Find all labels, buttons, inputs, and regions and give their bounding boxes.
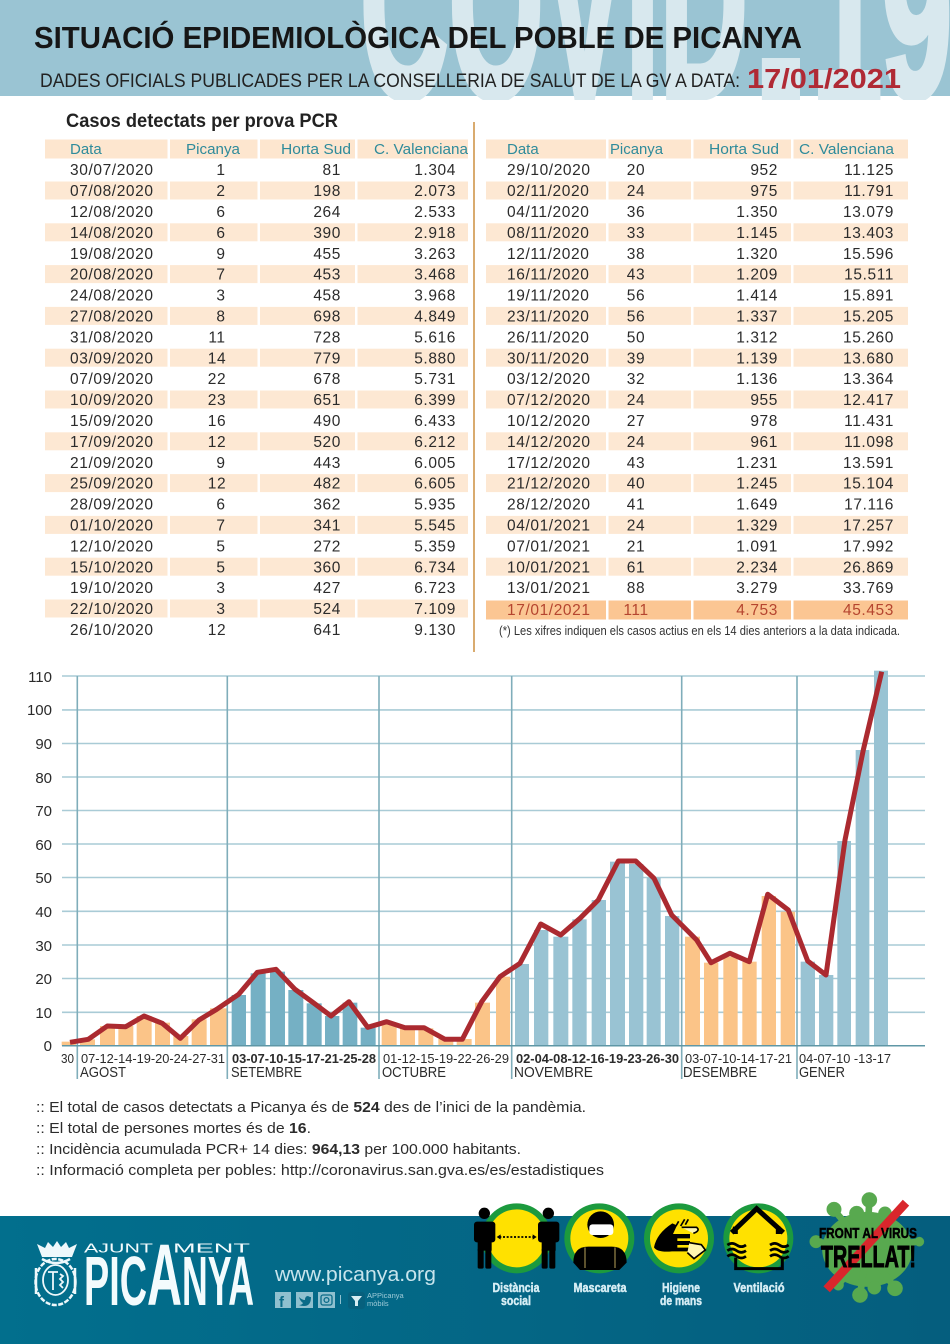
right table rows: 19/11/2020 xyxy=(507,288,589,305)
social icons: APPicanya xyxy=(367,1291,405,1300)
header banner xyxy=(0,0,950,100)
left table rows: 458 xyxy=(313,288,341,305)
right table rows: 13/01/2021 xyxy=(507,580,591,597)
red trend line xyxy=(70,672,882,1042)
left table rows: 5.935 xyxy=(414,497,456,514)
y axis labels xyxy=(27,669,52,1055)
right table rows: 33 xyxy=(627,225,645,242)
left table rows: 30/07/2020 xyxy=(70,162,154,179)
right table rows: 27 xyxy=(627,413,645,430)
right table rows: 07/12/2020 xyxy=(507,392,591,409)
right table rows: 36 xyxy=(627,204,645,221)
text block: notes: :: Informació completa per pobles: http://coronavirus.san.gva.es/es/estadistiques xyxy=(36,1162,604,1179)
left table rows: 14 xyxy=(208,350,226,367)
icon captions: Higiene xyxy=(662,1280,700,1295)
left table rows: 6.399 xyxy=(414,392,456,409)
highlighted latest row xyxy=(507,602,894,619)
icon captions: Distància xyxy=(492,1280,540,1295)
right table rows: 43 xyxy=(627,455,645,472)
left table rows: 07/09/2020 xyxy=(70,371,154,388)
right table rows: 15.104 xyxy=(843,476,894,493)
left table rows: 19/08/2020 xyxy=(70,246,154,263)
left table rows: 6.723 xyxy=(414,580,456,597)
x axis month labels: DESEMBRE xyxy=(683,1065,757,1081)
right table header: Data xyxy=(507,141,539,158)
left table rows: 5.545 xyxy=(414,518,456,534)
y axis labels: 100 xyxy=(27,702,52,719)
right table rows: 61 xyxy=(627,559,645,576)
panel: right table xyxy=(486,139,908,620)
wordmark: PIC xyxy=(84,1242,147,1320)
x axis month labels: OCTUBRE xyxy=(382,1065,446,1081)
left table header xyxy=(70,141,469,158)
left table rows: 28/09/2020 xyxy=(70,497,154,514)
left table rows: 26/10/2020 xyxy=(70,622,154,639)
right table rows: 15.511 xyxy=(844,267,894,284)
left table rows: 6.005 xyxy=(414,455,456,472)
right table rows: 50 xyxy=(627,329,645,346)
left table rows: 6.433 xyxy=(414,413,456,430)
wordmark xyxy=(84,1227,254,1324)
left table rows: 198 xyxy=(313,183,341,200)
left table rows: 678 xyxy=(313,371,341,388)
right table rows: 15.205 xyxy=(843,308,894,326)
right table rows: 17/12/2020 xyxy=(507,455,591,472)
y axis labels: 110 xyxy=(28,669,52,686)
icon captions xyxy=(492,1280,785,1308)
left table rows: 22 xyxy=(208,371,226,388)
left table rows: 15/09/2020 xyxy=(70,413,154,430)
x axis day labels: 03-07-10-15-17-21-25-28 xyxy=(232,1051,376,1066)
panel: left table xyxy=(45,139,469,639)
right table header xyxy=(507,141,895,158)
right table rows: 21/12/2020 xyxy=(507,476,591,493)
left table rows: 3.263 xyxy=(414,246,456,263)
left table rows: 5 xyxy=(216,538,226,555)
right table rows: 13.079 xyxy=(843,204,894,221)
left table rows: 2.073 xyxy=(414,183,456,200)
right table rows: 1.231 xyxy=(736,455,778,472)
left table rows: 728 xyxy=(313,329,341,346)
left table rows: 5.616 xyxy=(414,329,456,346)
left table rows: 453 xyxy=(313,267,341,284)
left table rows: 3.968 xyxy=(414,288,456,305)
left table rows: 17/09/2020 xyxy=(70,434,154,451)
left table rows: 21/09/2020 xyxy=(70,455,154,472)
right table header: Horta Sud xyxy=(709,141,779,158)
right table rows: 56 xyxy=(627,288,645,305)
right table rows: 1.337 xyxy=(736,308,778,326)
left table rows: 27/08/2020 xyxy=(70,308,154,326)
bars: left half xyxy=(62,972,490,1046)
baseline xyxy=(62,1045,925,1047)
right table rows: 1.312 xyxy=(736,329,778,346)
right table rows xyxy=(507,162,894,597)
right table rows: 29/10/2020 xyxy=(507,162,591,179)
x axis month labels xyxy=(80,1065,845,1081)
highlighted latest row: 45.453 xyxy=(843,602,894,619)
left table rows: 482 xyxy=(313,476,341,493)
right table rows: 978 xyxy=(750,413,778,430)
right table header: C. Valenciana xyxy=(799,141,895,158)
x axis day labels: 02-04-08-12-16-19-23-26-30 xyxy=(516,1051,679,1066)
right table rows: 15.260 xyxy=(843,329,894,346)
icon captions: Mascareta xyxy=(574,1280,627,1295)
social icons xyxy=(275,1291,405,1311)
left table rows: 427 xyxy=(313,580,341,597)
date: 17/01/2021 xyxy=(747,63,901,94)
right table rows: 1.320 xyxy=(736,246,778,263)
right table rows: 28/12/2020 xyxy=(507,497,591,514)
right table rows: 30/11/2020 xyxy=(507,350,589,367)
x axis day labels: 03-07-10-14-17-21 xyxy=(685,1051,792,1066)
left table rows: 2 xyxy=(216,183,226,200)
icon: coat of arms xyxy=(36,1241,77,1305)
right table rows: 03/12/2020 xyxy=(507,371,591,388)
left table rows: 455 xyxy=(313,246,341,263)
right table rows: 11.125 xyxy=(844,162,894,179)
right table rows: 17.116 xyxy=(844,497,894,514)
left table rows: 22/10/2020 xyxy=(70,601,154,618)
left table rows: 7 xyxy=(216,267,226,284)
highlighted latest row: 111 xyxy=(623,602,649,619)
right table rows: 13.364 xyxy=(843,371,894,388)
left table rows: 490 xyxy=(313,413,341,430)
left table rows: 264 xyxy=(313,204,341,221)
text block: notes xyxy=(36,1099,604,1179)
left table rows: 2.533 xyxy=(414,204,456,221)
left table rows: 9 xyxy=(216,246,226,263)
left table rows: 5 xyxy=(216,559,226,576)
right table rows: 975 xyxy=(750,183,778,200)
right table rows: 04/01/2021 xyxy=(507,518,591,534)
x axis day labels: 01-12-15-19-22-26-29 xyxy=(383,1051,509,1066)
y axis labels: 80 xyxy=(35,770,52,787)
left table rows: 19/10/2020 xyxy=(70,580,154,597)
left table rows: 3 xyxy=(216,580,226,597)
left table rows: 2.918 xyxy=(414,225,456,242)
right table rows: 17.257 xyxy=(843,518,894,534)
right table rows: 23/11/2020 xyxy=(507,308,589,326)
right table rows: 40 xyxy=(627,476,645,493)
right table rows: 1.245 xyxy=(736,476,778,493)
bars: right half xyxy=(496,671,888,1046)
y axis labels: 30 xyxy=(35,938,52,955)
campaign slogan xyxy=(819,1225,917,1274)
right table rows: 1.649 xyxy=(736,497,778,514)
right table rows: 1.145 xyxy=(736,225,778,242)
left table rows: 9 xyxy=(216,455,226,472)
right table rows: 1.091 xyxy=(736,538,778,555)
x axis month labels: NOVEMBRE xyxy=(514,1065,593,1081)
right table rows: 3.279 xyxy=(736,580,778,597)
left table rows: 362 xyxy=(313,497,341,514)
left table rows: 3 xyxy=(216,601,226,618)
right table rows: 1.350 xyxy=(736,204,778,221)
highlighted latest row: 17/01/2021 xyxy=(507,602,591,619)
left table rows: 07/08/2020 xyxy=(70,183,154,200)
left table rows: 641 xyxy=(313,622,341,639)
right table rows: 24 xyxy=(627,183,645,200)
right table rows: 88 xyxy=(627,580,645,597)
left table rows: 4.849 xyxy=(414,308,456,326)
social icons: f xyxy=(279,1294,285,1311)
right table rows: 04/11/2020 xyxy=(507,204,589,221)
right table rows: 1.139 xyxy=(736,350,778,367)
left table header: Horta Sud xyxy=(281,141,351,158)
right table rows: 32 xyxy=(627,371,645,388)
right table rows: 952 xyxy=(750,162,778,179)
left table rows: 14/08/2020 xyxy=(70,225,154,242)
right table rows: 1.209 xyxy=(736,267,778,284)
left table rows: 12/08/2020 xyxy=(70,204,154,221)
right table rows: 02/11/2020 xyxy=(507,183,589,200)
left table rows: 6 xyxy=(216,225,226,242)
right table rows: 24 xyxy=(627,518,645,534)
chart: cases bars and line xyxy=(27,669,925,1081)
icon: ventilation xyxy=(723,1203,793,1273)
right table rows: 1.136 xyxy=(736,371,778,388)
text block: notes: :: El total de persones mortes és de 16. xyxy=(36,1120,311,1137)
right table rows: 10/01/2021 xyxy=(507,559,591,576)
x axis month labels: SETEMBRE xyxy=(231,1065,302,1081)
left table rows: 272 xyxy=(313,538,341,555)
left table rows: 24/08/2020 xyxy=(70,288,154,305)
left table rows: 25/09/2020 xyxy=(70,476,154,493)
right table rows: 1.414 xyxy=(736,288,778,305)
left table rows: 9.130 xyxy=(414,622,456,639)
right table rows: 13.591 xyxy=(843,455,894,472)
left table rows: 15/10/2020 xyxy=(70,559,154,576)
left table header: C. Valenciana xyxy=(374,141,469,158)
left table rows: 3.468 xyxy=(414,267,456,284)
footnote: (*) Les xifres indiquen els casos actius en els 14 dies anteriors a la data indicada. xyxy=(499,624,900,638)
y axis labels: 20 xyxy=(35,971,52,988)
left table rows: 779 xyxy=(313,350,341,367)
right table rows: 08/11/2020 xyxy=(507,225,589,242)
icon: virus with slash xyxy=(810,1192,924,1303)
right table rows: 14/12/2020 xyxy=(507,434,591,451)
x axis day labels: 30 xyxy=(61,1051,74,1066)
right table rows: 15.596 xyxy=(843,246,894,263)
social icons: mòbils xyxy=(367,1299,389,1308)
icon captions: Ventilació xyxy=(734,1280,785,1295)
table heading: Casos detectats per prova PCR xyxy=(66,111,338,132)
y axis labels: 90 xyxy=(35,736,52,753)
right table rows: 11.791 xyxy=(844,183,894,200)
x axis day labels xyxy=(61,1051,891,1066)
subtitle: DADES OFICIALS PUBLICADES PER LA CONSELLERIA DE SALUT DE LA GV A DATA: xyxy=(40,71,740,92)
y axis labels: 50 xyxy=(35,870,52,887)
highlighted latest row: 4.753 xyxy=(736,602,778,619)
x axis month labels: GENER xyxy=(799,1065,845,1081)
decorative ghost text COVID-19 xyxy=(364,0,950,100)
left table rows: 6 xyxy=(216,497,226,514)
left table header: Data xyxy=(70,141,102,158)
right table rows: 43 xyxy=(627,267,645,284)
right table rows: 13.680 xyxy=(843,350,894,367)
table divider xyxy=(473,122,475,652)
icon captions: de mans xyxy=(660,1293,702,1308)
icon captions: social xyxy=(501,1293,531,1308)
icon: hand hygiene xyxy=(644,1203,714,1273)
y axis labels: 10 xyxy=(35,1005,52,1022)
left table rows: 443 xyxy=(313,455,341,472)
left table rows: 520 xyxy=(313,434,341,451)
right table rows: 16/11/2020 xyxy=(507,267,589,284)
right table rows: 15.891 xyxy=(843,288,894,305)
title: SITUACIÓ EPIDEMIOLÒGICA DEL POBLE DE PICANYA xyxy=(34,19,802,55)
left table rows: 360 xyxy=(313,559,341,576)
right table rows: 961 xyxy=(750,434,778,451)
right table rows: 10/12/2020 xyxy=(507,413,591,430)
left table rows: 01/10/2020 xyxy=(70,518,154,534)
left table rows: 651 xyxy=(313,392,341,409)
x axis month labels: AGOST xyxy=(80,1065,126,1081)
right table rows: 1.329 xyxy=(736,518,778,534)
left table rows: 8 xyxy=(216,308,226,326)
logo: Ajuntament de Picanya xyxy=(36,1227,254,1324)
y axis labels: 0 xyxy=(44,1038,52,1055)
right table rows: 12.417 xyxy=(843,392,894,409)
y axis labels: 70 xyxy=(35,803,52,820)
left table rows: 23 xyxy=(208,392,226,409)
left table header: Picanya xyxy=(186,141,241,158)
left table rows: 20/08/2020 xyxy=(70,267,154,284)
left table rows: 6 xyxy=(216,204,226,221)
left table rows: 03/09/2020 xyxy=(70,350,154,367)
left table rows: 5.880 xyxy=(414,350,456,367)
right table rows: 24 xyxy=(627,434,645,451)
right table rows: 955 xyxy=(750,392,778,409)
footer band xyxy=(0,1216,950,1344)
left table rows: 1 xyxy=(216,162,226,179)
left table rows: 12/10/2020 xyxy=(70,538,154,555)
left table rows: 10/09/2020 xyxy=(70,392,154,409)
text block: notes: :: El total de casos detectats a Picanya és de 524 des de l’inici de la pandèmia. xyxy=(36,1099,586,1116)
right table rows: 07/01/2021 xyxy=(507,538,591,555)
month dividers xyxy=(77,676,797,1079)
left table rows: 5.731 xyxy=(414,371,456,388)
right table rows: 2.234 xyxy=(736,559,778,576)
right table rows: 11.431 xyxy=(844,413,894,430)
right table rows: 17.992 xyxy=(843,538,894,555)
right table rows: 13.403 xyxy=(843,225,894,242)
right table rows: 12/11/2020 xyxy=(507,246,589,263)
left table rows: 698 xyxy=(313,308,341,326)
left table rows: 11 xyxy=(208,329,226,346)
y axis labels: 60 xyxy=(35,837,52,854)
wordmark: NYA xyxy=(182,1242,254,1320)
left table rows: 1.304 xyxy=(414,162,456,179)
left table rows: 524 xyxy=(313,601,341,618)
right table rows: 41 xyxy=(627,497,645,514)
left table rows: 390 xyxy=(313,225,341,242)
left table rows: 12 xyxy=(208,434,226,451)
left table rows: 341 xyxy=(313,518,341,534)
left table rows: 3 xyxy=(216,288,226,305)
x axis day labels: 07-12-14-19-20-24-27-31 xyxy=(81,1051,225,1066)
y axis labels: 40 xyxy=(35,904,52,921)
icon: social distance xyxy=(474,1203,559,1273)
left table rows: 6.605 xyxy=(414,476,456,493)
right table rows: 33.769 xyxy=(843,580,894,597)
left table rows: 12 xyxy=(208,622,226,639)
left table rows: 7 xyxy=(216,518,226,534)
right table rows: 24 xyxy=(627,392,645,409)
right table rows: 39 xyxy=(627,350,645,367)
right table rows: 21 xyxy=(627,538,645,555)
website: www.picanya.org xyxy=(274,1264,436,1286)
left table rows xyxy=(70,162,456,639)
left table rows: 5.359 xyxy=(414,538,456,555)
left table rows: 7.109 xyxy=(414,601,456,618)
right table rows: 11.098 xyxy=(844,434,894,451)
left table rows: 81 xyxy=(323,162,341,179)
right table rows: 20 xyxy=(627,162,645,179)
x axis day labels: 04-07-10 -13-17 xyxy=(799,1051,891,1066)
right table rows: 26/11/2020 xyxy=(507,329,589,346)
wordmark: MENT xyxy=(173,1240,250,1256)
left table rows: 31/08/2020 xyxy=(70,329,154,346)
right table rows: 38 xyxy=(627,246,645,263)
campaign slogan: FRONT AL VIRUS xyxy=(819,1225,917,1242)
wordmark: AJUNT xyxy=(84,1240,153,1256)
left table rows: 6.212 xyxy=(414,434,456,451)
right table rows: 56 xyxy=(627,308,645,326)
icon: mask xyxy=(564,1203,634,1273)
left table rows: 16 xyxy=(208,413,226,430)
text block: notes: :: Incidència acumulada PCR+ 14 dies: 964,13 per 100.000 habitants. xyxy=(36,1141,521,1158)
left table rows: 6.734 xyxy=(414,559,456,576)
left table rows: 12 xyxy=(208,476,226,493)
right table header: Picanya xyxy=(610,141,664,158)
icon group: prevention measures xyxy=(474,1192,924,1308)
right table rows: 26.869 xyxy=(843,559,894,576)
wordmark: A xyxy=(147,1227,182,1324)
